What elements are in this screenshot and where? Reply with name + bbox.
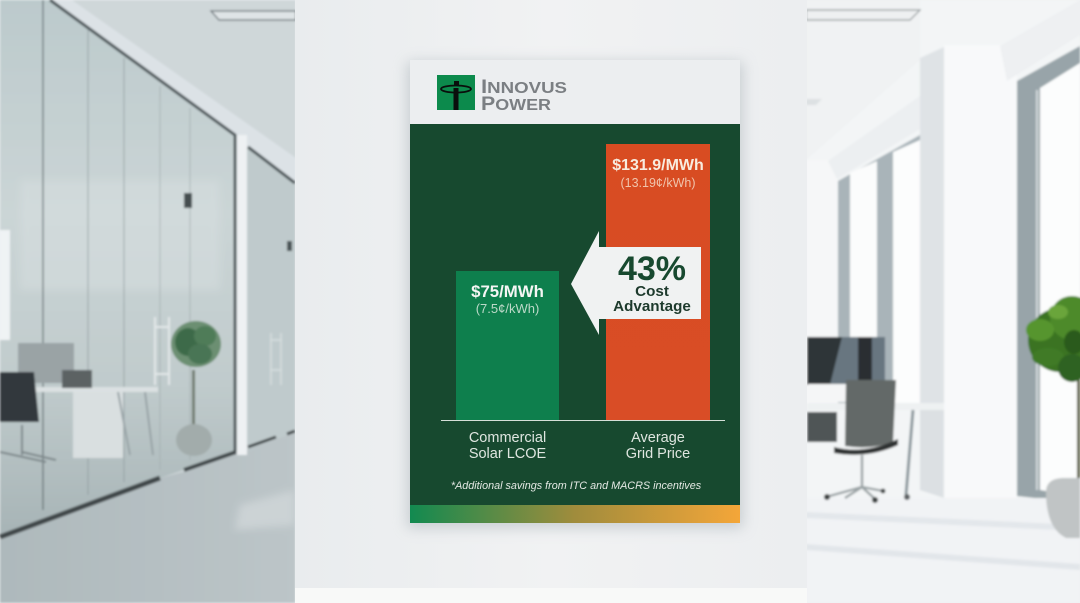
callout label: Cost (635, 283, 669, 300)
footnote: *Additional savings from ITC and MACRS incentives (451, 480, 702, 492)
solar value: $75/MWh (471, 282, 544, 301)
office chair (807, 380, 910, 503)
monitor (807, 337, 885, 385)
right bright office (806, 0, 1080, 603)
logo mark (437, 75, 475, 110)
label: average grid price: Average (631, 430, 685, 446)
logo (437, 75, 567, 115)
percentage: 43% (618, 250, 686, 288)
grid value: $131.9/MWh (612, 157, 704, 174)
poster (410, 60, 740, 523)
bar: commercial solar (456, 271, 559, 420)
grid unit value: (13.19¢/kWh) (620, 176, 696, 190)
poster body (410, 124, 740, 505)
poster header (410, 60, 740, 124)
callout label: Advantage (613, 298, 691, 315)
ceiling vent (211, 11, 296, 20)
label: commercial solar LCOE: Solar LCOE (469, 446, 547, 462)
centre soffit (828, 96, 920, 179)
footer gradient band (410, 505, 740, 523)
poster shadow (407, 62, 743, 528)
label: commercial solar LCOE: Commercial (469, 430, 546, 446)
left glass-walled corridor (0, 0, 296, 603)
interior desk and chairs (18, 343, 74, 383)
door handle (155, 317, 169, 385)
centre windows (838, 135, 920, 405)
solar unit value: (7.5¢/kWh) (476, 301, 539, 316)
label: average grid price: Grid Price (626, 446, 690, 462)
potted plant, left (171, 321, 221, 456)
logo wordmark line one: INNOVUS (481, 77, 567, 98)
right wall soffit and window (1000, 0, 1080, 81)
axis line (441, 420, 725, 422)
centre feature wall (295, 0, 807, 603)
potted plant, right (1026, 296, 1080, 538)
arrow callout: cost advantage (571, 231, 701, 335)
logo wordmark line two: POWER (481, 94, 551, 115)
bar: grid price (606, 144, 710, 420)
column (920, 47, 944, 498)
floor (806, 498, 1080, 603)
desk (807, 403, 944, 410)
